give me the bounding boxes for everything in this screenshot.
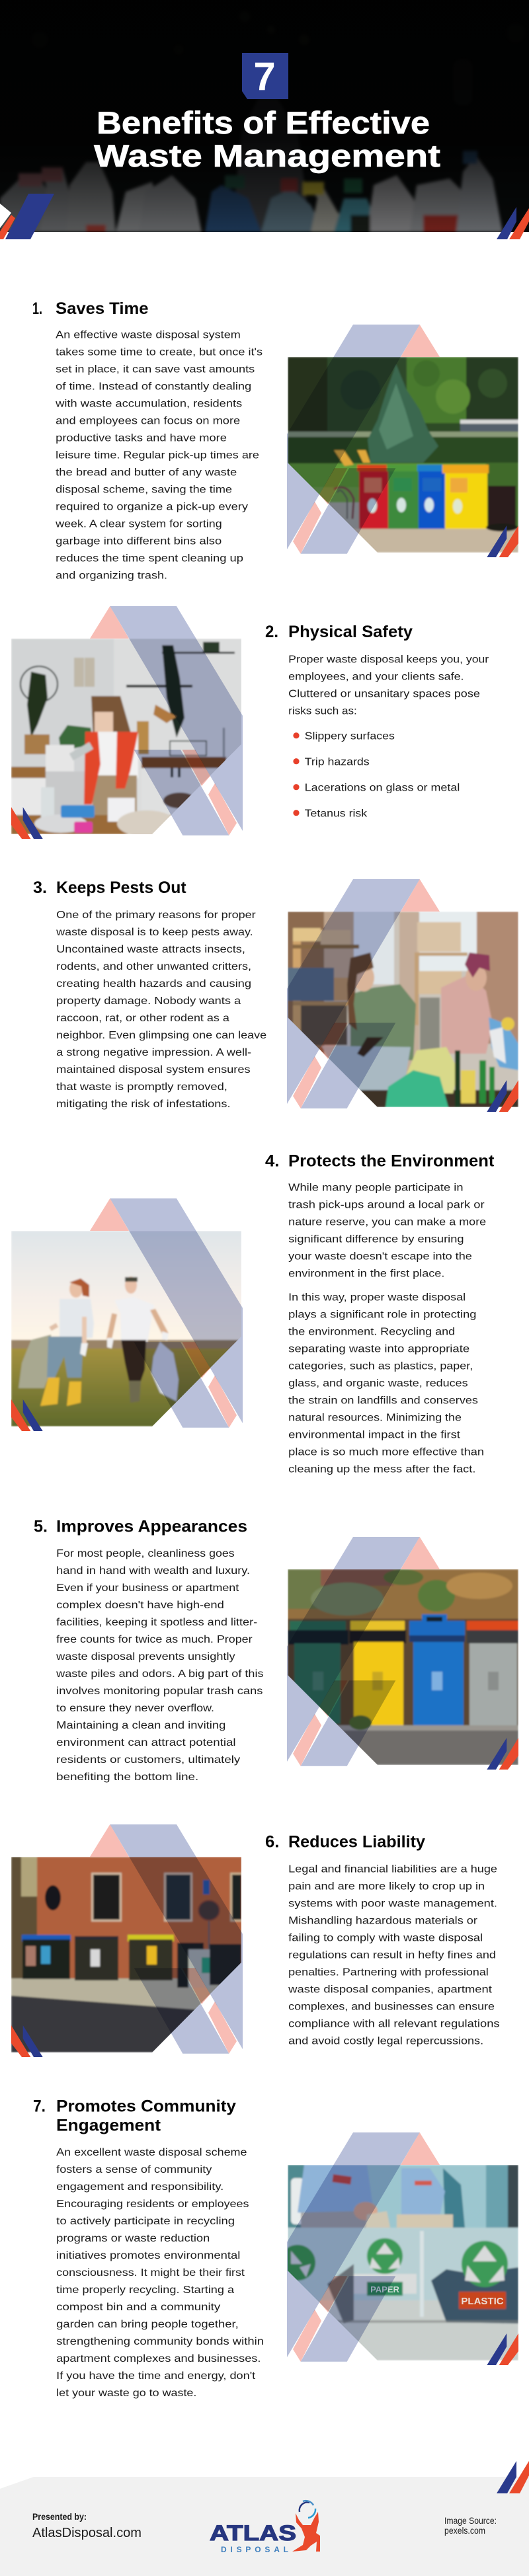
- label: plastic: PLASTIC: [461, 2296, 504, 2307]
- body text: mitigating the risk of infestations.: [56, 1099, 230, 1110]
- bullet list of risks: Lacerations on glass or metal: [305, 782, 460, 793]
- body text: [55, 330, 263, 582]
- heading: 3.: [33, 878, 47, 897]
- title: Waste Management: [94, 138, 440, 173]
- body text: consciousness. It might be their first: [56, 2267, 245, 2279]
- motif: A-shaped overlay: [287, 2132, 518, 2365]
- body text: residents or customers, ultimately: [56, 1754, 240, 1766]
- body text: reduces the time spent cleaning up: [56, 553, 243, 565]
- badge: number 7: [242, 53, 288, 99]
- body text: garden can bring people together,: [56, 2319, 239, 2330]
- photo panel 2: woman sorting recycling in kitchen: [11, 606, 243, 839]
- left corner stripes: [0, 194, 54, 239]
- body text: Proper waste disposal keeps you, your: [288, 654, 489, 665]
- body text: compliance with all relevant regulations: [288, 2018, 500, 2029]
- body text: engagement and responsibility.: [56, 2181, 224, 2193]
- body text: neighbor. Even glimpsing one can leave: [56, 1030, 266, 1041]
- label: paper: PAPER: [370, 2284, 400, 2294]
- body paragraph 2: the strain on landfills and conserves: [288, 1395, 478, 1407]
- heading: 2.: [265, 623, 278, 641]
- body text: productive tasks and have more: [56, 433, 227, 444]
- body paragraph 1: trash pick-ups around a local park or: [288, 1200, 485, 1211]
- photo panel 1: recycling bins in a park: [287, 325, 518, 557]
- heading: 4.: [265, 1151, 279, 1170]
- body paragraph 1: nature reserve, you can make a more: [288, 1217, 486, 1228]
- bullet list of risks: Trip hazards: [305, 756, 370, 767]
- presented by: AtlasDisposal.com: [32, 2526, 142, 2540]
- heading: Protects the Environment: [288, 1151, 495, 1170]
- body text: Legal and financial liabilities are a huge: [288, 1863, 497, 1875]
- body text: and avoid costly legal repercussions.: [288, 2035, 483, 2047]
- body text: initiatives promotes environmental: [56, 2250, 240, 2261]
- body paragraph 2: place is so much more effective than: [288, 1447, 484, 1458]
- heading: Promotes Community: [56, 2097, 236, 2115]
- presented by: [32, 2511, 142, 2540]
- motif: A-shaped overlay: [287, 879, 518, 1112]
- section 5: improves appearances text: [34, 1518, 263, 1783]
- hero photo: plastic bottles: [0, 0, 529, 232]
- body text: [288, 654, 489, 717]
- body text: [56, 910, 266, 1110]
- body text: and organizing trash.: [56, 570, 167, 582]
- image source: [444, 2515, 497, 2536]
- heading: Physical Safety: [288, 623, 413, 641]
- section 2: physical safety text: [265, 623, 489, 819]
- heading: [33, 2097, 236, 2134]
- image source: Image Source:: [444, 2515, 497, 2526]
- body text: facilities, keeping it spotless and litter-: [56, 1617, 257, 1628]
- photo: women sorting: [288, 912, 518, 1107]
- logo: Atlas Disposal: ATLAS: [210, 2521, 296, 2545]
- body text: involves monitoring popular trash cans: [56, 1686, 263, 1697]
- body text: to actively participate in recycling: [56, 2216, 235, 2227]
- heading: Saves Time: [56, 299, 149, 318]
- body text: regulations can result in hefty fines and: [288, 1949, 496, 1961]
- body text: and employees can focus on more: [56, 416, 240, 427]
- header banner: [0, 0, 529, 239]
- body paragraph 2: cleaning up the mess after the fact.: [288, 1464, 475, 1475]
- body text: waste disposal companies, apartment: [288, 1984, 493, 1995]
- logo: Atlas Disposal: DISPOSAL: [221, 2545, 288, 2554]
- photo panel 4: couple collecting trash in a field: [11, 1198, 243, 1431]
- body text: required to organize a pick-up every: [56, 502, 248, 513]
- body text: raccoon, rat, or other rodent as a: [56, 1013, 229, 1024]
- footer background: [0, 2477, 529, 2576]
- heading: Keeps Pests Out: [56, 878, 186, 897]
- body text: employees, and your clients safe.: [288, 671, 464, 682]
- bullet list of risks: Slippery surfaces: [305, 730, 395, 742]
- body text: One of the primary reasons for proper: [56, 910, 256, 921]
- section 7: promotes community engagement text: [33, 2097, 264, 2399]
- body paragraph 2: the environment. Recycling and: [288, 1327, 455, 1338]
- footer corner stripes: [497, 2461, 529, 2493]
- bullet list of risks: Tetanus risk: [305, 808, 368, 819]
- body text: An effective waste disposal system: [56, 330, 241, 341]
- body text: the bread and butter of any waste: [56, 467, 237, 479]
- badge: number 7: 7: [253, 54, 276, 98]
- photo: street dumpsters: [11, 1857, 242, 2052]
- heading: 1.: [32, 299, 42, 318]
- body paragraph 2: In this way, proper waste disposal: [288, 1292, 466, 1304]
- body paragraph 2: [288, 1292, 484, 1475]
- photo: recycling boxes: [280, 2165, 518, 2361]
- body paragraph 2: natural resources. Minimizing the: [288, 1413, 462, 1424]
- body paragraph 2: environmental impact in the first: [288, 1430, 461, 1441]
- body text: complex doesn't have high-end: [56, 1600, 224, 1611]
- body text: [56, 2147, 264, 2399]
- body text: waste disposal is to keep pests away.: [56, 927, 253, 938]
- section 3: keeps pests out text: [33, 878, 266, 1110]
- photo: field cleanup: [11, 1231, 242, 1426]
- body text: of time. Instead of constantly dealing: [56, 381, 251, 393]
- body text: garbage into different bins also: [56, 536, 222, 547]
- body paragraph 1: environment in the first place.: [288, 1268, 444, 1280]
- body text: Mishandling hazardous materials or: [288, 1915, 478, 1926]
- body text: a strong negative impression. A well-: [56, 1047, 251, 1058]
- photo panel 5: four bins against rocks: [287, 1537, 518, 1770]
- motif: A-shaped overlay: [11, 606, 243, 839]
- body text: property damage. Nobody wants a: [56, 995, 241, 1007]
- body paragraph 1: your waste doesn't escape into the: [288, 1251, 472, 1263]
- heading: Engagement: [56, 2116, 161, 2134]
- body text: fosters a sense of community: [56, 2164, 212, 2175]
- body paragraph 2: plays a significant role in protecting: [288, 1309, 476, 1321]
- presented by: Presented by:: [32, 2511, 87, 2522]
- body text: risks such as:: [288, 705, 357, 717]
- body text: hand in hand with wealth and luxury.: [56, 1565, 250, 1577]
- body text: strengthening community bonds within: [56, 2336, 264, 2347]
- title: Benefits of Effective: [97, 105, 430, 140]
- photo panel 7: people with recycling boxes: [280, 2132, 518, 2365]
- photo: coloured bins: [288, 1569, 518, 1765]
- photo panel 3: two women sorting waste: [287, 879, 518, 1112]
- body text: failing to comply with waste disposal: [288, 1932, 483, 1943]
- body text: penalties. Partnering with professional: [288, 1967, 489, 1978]
- title: [94, 105, 440, 173]
- body text: Maintaining a clean and inviting: [56, 1720, 225, 1731]
- section 1: saves time text: [32, 299, 263, 582]
- motif: A-shaped overlay: [287, 1537, 518, 1770]
- body text: Cluttered or unsanitary spaces pose: [288, 688, 480, 699]
- body text: rodents, and other unwanted critters,: [56, 961, 251, 972]
- right corner stripes: [497, 207, 529, 239]
- heading: Improves Appearances: [56, 1518, 247, 1536]
- heading: 5.: [34, 1518, 48, 1536]
- body text: Encouraging residents or employees: [56, 2199, 249, 2210]
- body text: let your waste go to waste.: [56, 2388, 196, 2399]
- section 6: reduces liability text: [265, 1832, 500, 2047]
- body text: maintained disposal system ensures: [56, 1064, 251, 1075]
- body text: leisure time. Regular pick-up times are: [56, 450, 259, 461]
- motif: A-shaped overlay: [11, 1824, 243, 2057]
- body text: week. A clear system for sorting: [55, 519, 222, 530]
- body text: that waste is promptly removed,: [56, 1081, 227, 1093]
- body text: waste disposal prevents unsightly: [56, 1651, 235, 1662]
- heading: 6.: [265, 1832, 279, 1851]
- body text: environment can attract potential: [56, 1737, 236, 1748]
- body text: For most people, cleanliness goes: [56, 1548, 235, 1559]
- body text: disposal scheme, saving the time: [56, 485, 232, 496]
- heading: Reduces Liability: [288, 1832, 425, 1851]
- body paragraph 1: While many people participate in: [288, 1183, 463, 1194]
- motif: A-shaped overlay: [11, 1198, 243, 1431]
- photo panel 6: dumpsters by an orange wall: [11, 1824, 243, 2057]
- body text: set in place, it can save vast amounts: [56, 364, 255, 375]
- body text: free counts for twice as much. Proper: [56, 1634, 253, 1645]
- body text: complexes, and businesses can ensure: [288, 2001, 495, 2012]
- body text: pain and are more likely to crop up in: [288, 1881, 485, 1892]
- body text: systems with poor waste management.: [288, 1898, 497, 1909]
- body text: programs or waste reduction: [56, 2233, 210, 2244]
- body paragraph 1: significant difference by ensuring: [288, 1234, 464, 1245]
- body text: time properly recycling. Starting a: [56, 2284, 234, 2296]
- photo: kitchen: [11, 639, 242, 837]
- body paragraph 2: categories, such as plastics, paper,: [288, 1361, 473, 1372]
- body text: Uncontained waste attracts insects,: [56, 944, 245, 955]
- body paragraph 2: separating waste into appropriate: [288, 1344, 469, 1355]
- body text: with waste accumulation, residents: [55, 399, 242, 410]
- body paragraph 2: glass, and organic waste, reduces: [288, 1378, 468, 1389]
- body text: [288, 1863, 500, 2047]
- image source: pexels.com: [444, 2525, 485, 2536]
- body text: If you have the time and energy, don't: [56, 2370, 256, 2382]
- body text: Even if your business or apartment: [56, 1582, 239, 1594]
- body text: [56, 1548, 263, 1783]
- heading: 7.: [33, 2097, 46, 2115]
- body text: takes some time to create, but once it's: [56, 347, 263, 358]
- motif: A-shaped overlay: [287, 325, 518, 557]
- body text: compost bin and a community: [56, 2302, 220, 2313]
- body text: apartment complexes and businesses.: [56, 2353, 261, 2364]
- body paragraph 1: [288, 1183, 486, 1280]
- section 4: protects the environment text: [265, 1151, 495, 1475]
- logo: Atlas Disposal: [210, 2501, 320, 2554]
- photo: park bins: [288, 357, 518, 553]
- body text: An excellent waste disposal scheme: [56, 2147, 247, 2158]
- body text: benefiting the bottom line.: [56, 1772, 198, 1783]
- footer: [0, 2461, 529, 2576]
- body text: waste piles and odors. A big part of this: [56, 1668, 264, 1680]
- body text: creating health hazards and causing: [56, 978, 251, 990]
- bullet list of risks: [293, 730, 460, 819]
- body text: to ensure they never overflow.: [56, 1703, 214, 1714]
